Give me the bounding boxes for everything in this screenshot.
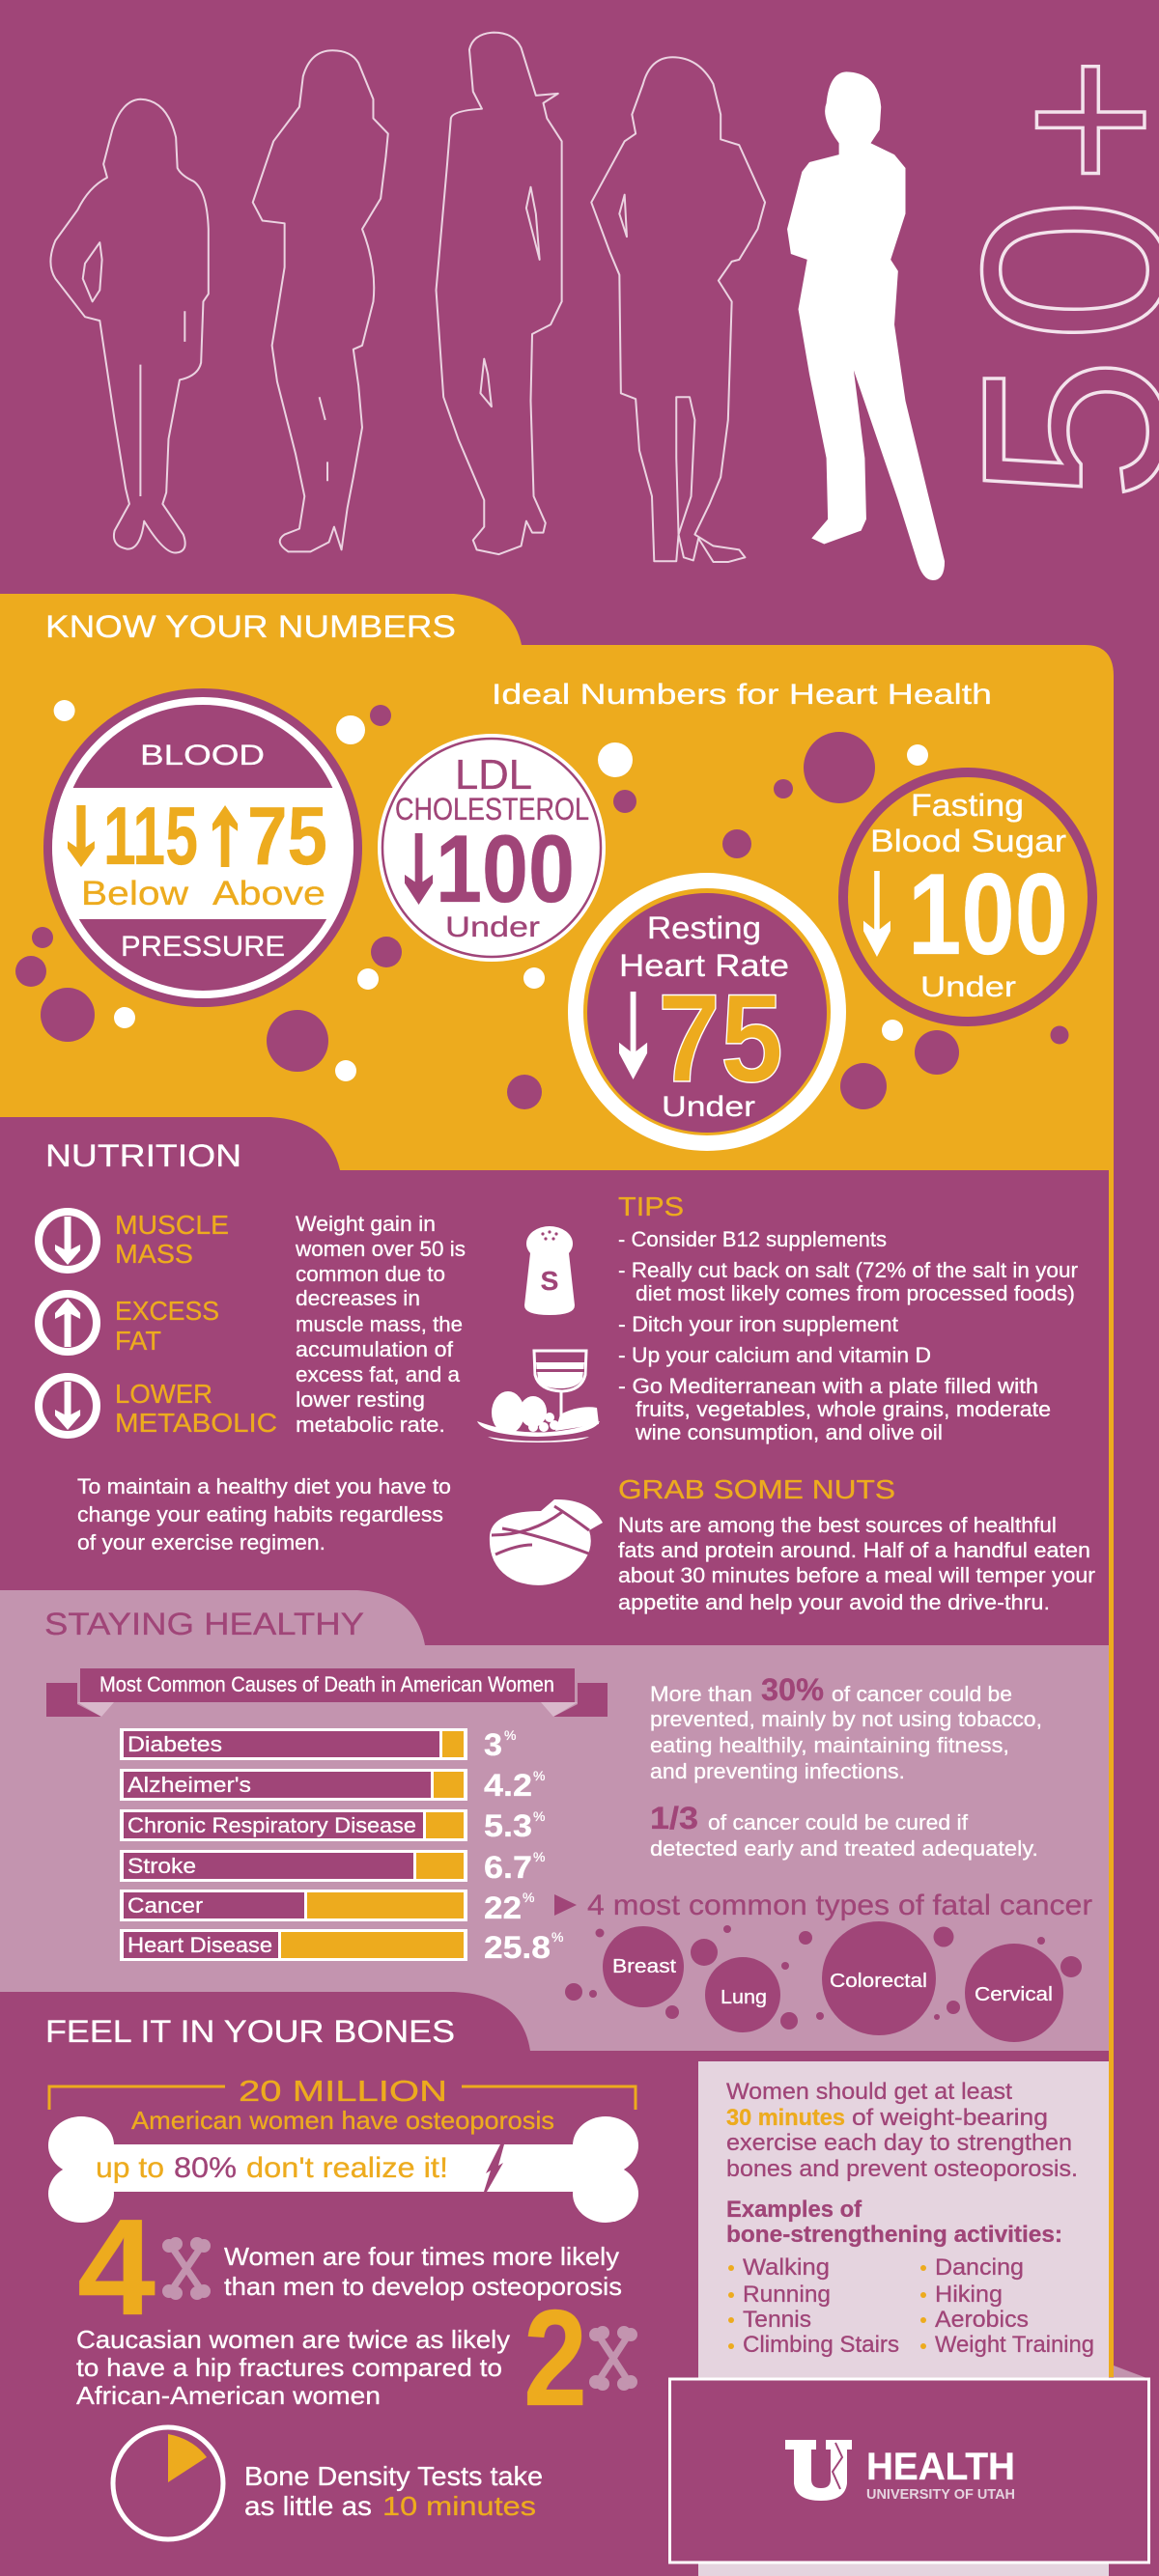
bar: heart disease <box>120 1929 563 1965</box>
list: tips: - Up your calcium and vitamin D <box>618 1343 931 1367</box>
section tab <box>0 1117 340 1170</box>
icon: broken bone: 80% <box>174 2152 237 2184</box>
bar: diabetes: 3 <box>484 1727 502 1762</box>
hero: five women silhouettes <box>50 33 945 580</box>
bar: stroke: 6.7 <box>484 1850 532 1885</box>
badge: resting heart rate: Under <box>662 1091 755 1123</box>
panel: staying healthy <box>0 1590 1109 2051</box>
panel: feel it in your bones <box>0 1992 1149 2576</box>
text: weight gain: muscle mass, the <box>296 1312 463 1336</box>
icon: salt shaker: S <box>541 1266 558 1296</box>
panel: know your numbers <box>0 594 1114 1170</box>
bracket line <box>49 2086 636 2110</box>
bar: diabetes: Diabetes <box>127 1732 222 1756</box>
list: tips: fruits, vegetables, whole grains, moderate <box>636 1397 1051 1421</box>
icon: broken bone <box>48 2116 638 2223</box>
text: cancer prevention: detected early and treated adequately. <box>650 1836 1038 1861</box>
bar: heart disease: Heart Disease <box>127 1933 272 1957</box>
bar: alzheimers: 4.2 <box>484 1768 532 1803</box>
text: exercise advice: of weight-bearing <box>852 2105 1048 2131</box>
text: weight gain: women over 50 is <box>295 1237 466 1261</box>
list: activities: Tennis <box>743 2307 811 2333</box>
text: weight gain <box>295 1212 466 1437</box>
list: activities: Dancing <box>935 2254 1024 2281</box>
badge: blood pressure: PRESSURE <box>121 931 285 963</box>
ribbon heading <box>46 1668 608 1717</box>
bar: heart disease: 25.8 <box>484 1930 551 1965</box>
label: lower metabolic: LOWER <box>115 1379 212 1409</box>
list: activities: Running <box>743 2282 831 2308</box>
stat: 2x <box>523 2282 634 2435</box>
bubble: colorectal <box>822 1921 936 2035</box>
badge: resting heart rate <box>568 873 846 1151</box>
label: excess fat: FAT <box>115 1326 161 1356</box>
badge: resting heart rate: Heart Rate <box>619 948 789 983</box>
text: nuts: about 30 minutes before a meal will temper your <box>618 1563 1095 1587</box>
caption: american women: American women have osteoporosis <box>131 2106 554 2135</box>
badge: LDL cholesterol <box>378 734 606 962</box>
badge: LDL cholesterol: CHOLESTEROL <box>395 792 589 826</box>
text: twice as likely: African-American women <box>76 2381 381 2410</box>
text: healthy diet: To maintain a healthy diet you have to <box>77 1474 451 1498</box>
badge: LDL cholesterol: Under <box>445 911 540 943</box>
text: nuts: appetite and help your avoid the drive-thru. <box>618 1590 1050 1614</box>
list: tips: wine consumption, and olive oil <box>635 1420 943 1444</box>
icon: nuts <box>490 1499 603 1585</box>
bar: chronic respiratory disease: Chronic Respiratory Disease <box>127 1813 416 1837</box>
text: weight gain: metabolic rate. <box>296 1413 445 1437</box>
bar: chronic respiratory disease: % <box>533 1808 545 1824</box>
bubble: cervical <box>965 1944 1063 2042</box>
text: cancer prevention: prevented, mainly by not using tobacco, <box>650 1707 1042 1731</box>
logo text: university of utah: UNIVERSITY OF UTAH <box>866 2486 1015 2503</box>
text: cancer prevention: eating healthily, maintaining fitness, <box>650 1733 1009 1757</box>
decorative dots <box>15 700 1068 1109</box>
text: cancer prevention: of cancer could be <box>832 1682 1012 1706</box>
icon: wine and fruit plate <box>477 1351 600 1442</box>
stat: 4x: 4 <box>77 2191 155 2344</box>
list: tips <box>618 1227 1078 1444</box>
ribbon heading: Most Common Causes of Death in American Women <box>99 1672 554 1696</box>
text: examples heading: bone-strengthening activities: <box>726 2222 1062 2248</box>
text: cancer prevention: More than <box>650 1682 752 1706</box>
subheading: Ideal Numbers for Heart Health <box>492 679 992 711</box>
bar: alzheimers <box>120 1768 545 1803</box>
heading: tips: TIPS <box>618 1191 684 1221</box>
bubble: breast <box>603 1926 684 2007</box>
bar: chronic respiratory disease: 5.3 <box>484 1808 532 1843</box>
text: exercise advice <box>726 2079 1078 2182</box>
label: excess fat: EXCESS <box>115 1296 219 1326</box>
text: nuts <box>618 1513 1095 1614</box>
icon: broken bone: don't realize it! <box>246 2152 448 2184</box>
bubble: colorectal: Colorectal <box>830 1971 927 1992</box>
text: examples heading <box>726 2197 1062 2248</box>
bubble: lung: Lung <box>721 1987 767 2008</box>
list: tips: - Consider B12 supplements <box>618 1227 887 1251</box>
icon: down arrow circle <box>39 1377 97 1435</box>
heading: FEEL IT IN YOUR BONES <box>45 2014 455 2049</box>
bar: diabetes <box>120 1727 516 1762</box>
cancer type bubbles <box>565 1921 1082 2042</box>
label: excess fat <box>115 1296 219 1356</box>
bar: stroke: % <box>533 1849 545 1864</box>
label: muscle mass: MUSCLE <box>115 1210 229 1240</box>
text: exercise advice: 30 minutes <box>726 2105 845 2131</box>
text: four times: than men to develop osteoporosis <box>224 2272 622 2301</box>
bar: diabetes: % <box>504 1727 516 1743</box>
text: bone density tests: 10 minutes <box>382 2491 536 2521</box>
badge: blood pressure <box>43 688 362 1007</box>
bar: alzheimers: Alzheimer's <box>127 1773 251 1797</box>
text: weight gain: Weight gain in <box>296 1212 436 1236</box>
bar: cancer: 22 <box>484 1890 522 1925</box>
silhouette outline 3 <box>437 33 562 554</box>
ribbon fold <box>1114 2366 1149 2379</box>
section tab <box>0 1992 530 2051</box>
text: bone density tests <box>244 2461 543 2521</box>
badge: LDL cholesterol: 100 <box>436 815 575 922</box>
stat: 2x: 2 <box>523 2282 587 2435</box>
label: muscle mass <box>115 1210 229 1269</box>
bubble: breast: Breast <box>612 1956 676 1977</box>
silhouette outline 1 <box>50 99 209 553</box>
text: cancer prevention: 1/3 <box>650 1801 698 1835</box>
logo text: health: HEALTH <box>866 2446 1015 2488</box>
text: nuts: fats and protein around. Half of a handful eaten <box>618 1538 1090 1562</box>
icon: clock ten minutes <box>113 2427 223 2539</box>
badge: blood pressure: Below <box>81 875 189 912</box>
heading: STAYING HEALTHY <box>44 1607 364 1641</box>
list: activities: Climbing Stairs <box>743 2332 899 2358</box>
icon: university U mark <box>785 2440 852 2501</box>
panel: nutrition <box>0 1117 1095 1614</box>
silhouette outline 4 <box>591 57 765 562</box>
text: cancer prevention: 30% <box>761 1672 824 1707</box>
list: tips: - Really cut back on salt (72% of the salt in your <box>618 1258 1078 1282</box>
bar chart: causes of death <box>120 1727 563 1965</box>
text: healthy diet: change your eating habits regardless <box>77 1502 443 1526</box>
bubble: lung <box>705 1957 780 2032</box>
text: bone density tests: Bone Density Tests take <box>244 2461 543 2491</box>
icon: triangle pointer <box>554 1894 577 1916</box>
text: weight gain: excess fat, and a <box>296 1362 461 1386</box>
label: lower metabolic: METABOLIC <box>115 1408 277 1438</box>
heading: NUTRITION <box>45 1138 241 1173</box>
badge: fasting blood sugar: Under <box>920 971 1016 1003</box>
badge: fasting blood sugar: 100 <box>908 850 1068 979</box>
list: activities: Weight Training <box>935 2332 1094 2358</box>
label: lower metabolic <box>115 1379 277 1438</box>
panel background <box>0 1590 1109 2051</box>
list: activities: Walking <box>743 2254 830 2281</box>
bubble: cervical: Cervical <box>975 1984 1053 2005</box>
panel: exercise box <box>698 2061 1109 2576</box>
bar: cancer: Cancer <box>127 1893 203 1918</box>
list: tips: - Ditch your iron supplement <box>618 1312 898 1336</box>
stat: 20 million: 20 MILLION <box>239 2074 447 2108</box>
subheading: fatal cancers: 4 most common types of fatal cancer <box>587 1890 1092 1921</box>
text: examples heading: Examples of <box>726 2197 862 2223</box>
bar: stroke <box>120 1849 545 1885</box>
label: muscle mass: MASS <box>115 1239 193 1269</box>
silhouette filled white <box>787 71 945 580</box>
text: healthy diet <box>77 1474 451 1554</box>
stat: 4x <box>77 2191 207 2344</box>
text: weight gain: common due to <box>296 1262 445 1286</box>
icon: down arrow circle <box>39 1212 97 1270</box>
text: four times <box>224 2242 622 2301</box>
list: activities: Hiking <box>935 2282 1003 2308</box>
text: cancer prevention: and preventing infections. <box>650 1759 905 1783</box>
badge: blood pressure: BLOOD <box>140 740 265 771</box>
text: cancer prevention <box>650 1672 1042 1861</box>
icon: broken bone: up to <box>96 2152 164 2184</box>
bar: cancer: % <box>523 1890 534 1905</box>
list: activities: Aerobics <box>935 2307 1029 2333</box>
heading: KNOW YOUR NUMBERS <box>45 609 456 644</box>
text: exercise advice: bones and prevent osteoporosis. <box>726 2156 1078 2182</box>
bar: alzheimers: % <box>533 1768 545 1783</box>
badge: blood pressure: 75 <box>247 791 327 882</box>
list: tips: - Go Mediterranean with a plate filled with <box>618 1374 1038 1398</box>
bar: heart disease: % <box>551 1929 563 1945</box>
badge: resting heart rate: 75 <box>658 967 783 1108</box>
badge: fasting blood sugar <box>843 772 1092 1022</box>
text: cancer prevention: of cancer could be cured if <box>708 1810 969 1834</box>
badge: fasting blood sugar: Fasting <box>911 788 1024 823</box>
badge: fasting blood sugar: Blood Sugar <box>870 824 1066 858</box>
text: four times: Women are four times more likely <box>224 2242 619 2271</box>
text: weight gain: accumulation of <box>296 1337 454 1361</box>
text: twice as likely <box>76 2325 510 2410</box>
badge: blood pressure: 115 <box>103 791 198 882</box>
text: twice as likely: to have a hip fractures compared to <box>76 2353 502 2382</box>
text: weight gain: lower resting <box>296 1387 425 1412</box>
badge: resting heart rate: Resting <box>647 910 761 945</box>
right gold rule <box>1109 1170 1114 2377</box>
bar: cancer <box>120 1890 534 1925</box>
text: weight gain: decreases in <box>296 1286 420 1310</box>
bar: chronic respiratory disease <box>120 1808 545 1843</box>
list: activities <box>728 2254 1094 2358</box>
text: exercise advice: Women should get at least <box>726 2079 1012 2105</box>
text: healthy diet: of your exercise regimen. <box>77 1530 325 1554</box>
text: exercise advice: exercise each day to strengthen <box>726 2130 1072 2156</box>
panel background <box>0 594 1114 1170</box>
silhouette outline 2 <box>253 50 388 551</box>
badge: LDL cholesterol: LDL <box>455 751 532 798</box>
list: tips: diet most likely comes from processed foods) <box>636 1281 1075 1305</box>
heading: grab some nuts: GRAB SOME NUTS <box>618 1474 895 1504</box>
icon: up arrow circle <box>39 1294 97 1352</box>
icon: salt shaker <box>524 1226 575 1315</box>
text: twice as likely: Caucasian women are twice as likely <box>76 2325 510 2354</box>
panel: logo box <box>670 2379 1149 2562</box>
bar: stroke: Stroke <box>127 1854 196 1878</box>
badge: blood pressure: Above <box>212 875 325 912</box>
text: nuts: Nuts are among the best sources of healthful <box>618 1513 1057 1537</box>
text: bone density tests: as little as <box>244 2491 372 2521</box>
